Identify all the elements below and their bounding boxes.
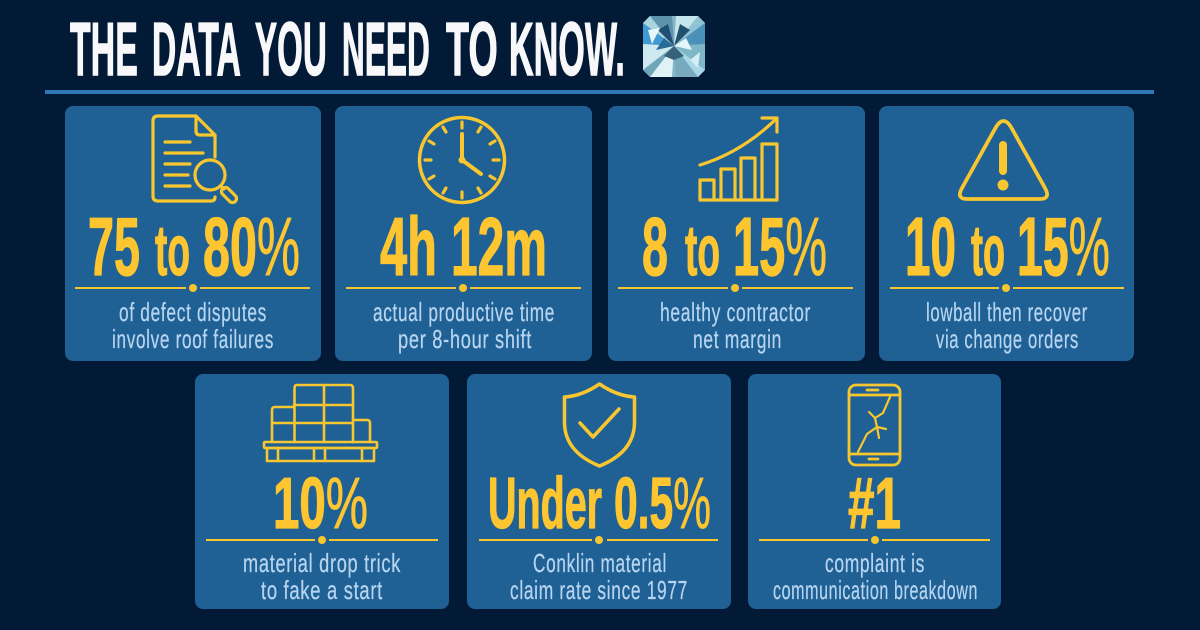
icon: pallet of boxes xyxy=(264,385,377,461)
description: complaint is xyxy=(825,548,925,578)
description xyxy=(510,548,688,605)
description: Conklin material xyxy=(533,548,667,578)
divider xyxy=(618,284,853,292)
description xyxy=(926,297,1088,354)
value xyxy=(905,200,1110,293)
title: THE xyxy=(70,7,138,91)
value: to xyxy=(685,212,720,291)
text: KNOW. xyxy=(509,7,625,91)
icon: rising bar chart xyxy=(700,118,777,200)
title xyxy=(70,7,625,91)
divider xyxy=(759,536,990,544)
divider xyxy=(346,284,581,292)
description xyxy=(660,297,811,354)
description: of defect disputes xyxy=(119,297,267,327)
panel: productive time xyxy=(335,106,592,361)
icon: clock xyxy=(420,118,504,202)
panel: claim rate xyxy=(467,374,731,609)
panel: change orders xyxy=(879,106,1134,361)
value: 15% xyxy=(1017,200,1110,293)
value: 10 xyxy=(905,200,956,293)
divider xyxy=(890,284,1124,292)
title: YOU xyxy=(255,7,327,91)
description: lowball then recover xyxy=(926,297,1088,327)
icon: document with magnifier xyxy=(153,116,238,204)
description: involve roof failures xyxy=(112,324,274,354)
description: claim rate since 1977 xyxy=(510,575,688,605)
header rule xyxy=(45,90,1154,94)
description xyxy=(373,297,555,354)
description xyxy=(773,548,978,605)
title: TO xyxy=(446,7,498,91)
value xyxy=(642,200,827,293)
divider xyxy=(75,284,310,292)
title: DATA xyxy=(152,7,241,91)
value: 4h xyxy=(380,200,437,293)
panel: roof failures xyxy=(65,106,321,361)
description: per 8-hour shift xyxy=(398,324,532,354)
value: to xyxy=(971,212,1005,291)
value xyxy=(88,200,300,293)
value: 15% xyxy=(733,200,827,293)
icon: warning triangle xyxy=(960,121,1047,199)
panel: net margin xyxy=(608,106,865,361)
description: communication breakdown xyxy=(773,575,978,605)
value: 12m xyxy=(451,200,547,293)
description xyxy=(112,297,274,354)
value xyxy=(380,200,547,293)
icon: cracked phone xyxy=(849,385,900,465)
icon: shield with check xyxy=(564,384,634,466)
panel: top complaint xyxy=(748,374,1001,609)
value: 75 xyxy=(88,200,140,293)
value: Under xyxy=(488,464,602,544)
description xyxy=(243,548,401,605)
description: to fake a start xyxy=(261,575,383,605)
value: 8 xyxy=(642,200,668,293)
divider xyxy=(479,536,718,544)
value: #1 xyxy=(848,464,901,544)
icon: diamond xyxy=(643,16,705,77)
description: actual productive time xyxy=(373,297,555,327)
panel: material drop xyxy=(195,374,449,609)
value: to xyxy=(155,212,190,291)
value: 80% xyxy=(203,200,300,293)
description: net margin xyxy=(693,324,782,354)
value: 10% xyxy=(273,464,368,544)
description: material drop trick xyxy=(243,548,401,578)
value: 0.5% xyxy=(614,464,711,544)
title: NEED xyxy=(342,7,430,91)
divider xyxy=(206,536,438,544)
description: healthy contractor xyxy=(660,297,811,327)
description: via change orders xyxy=(936,324,1079,354)
